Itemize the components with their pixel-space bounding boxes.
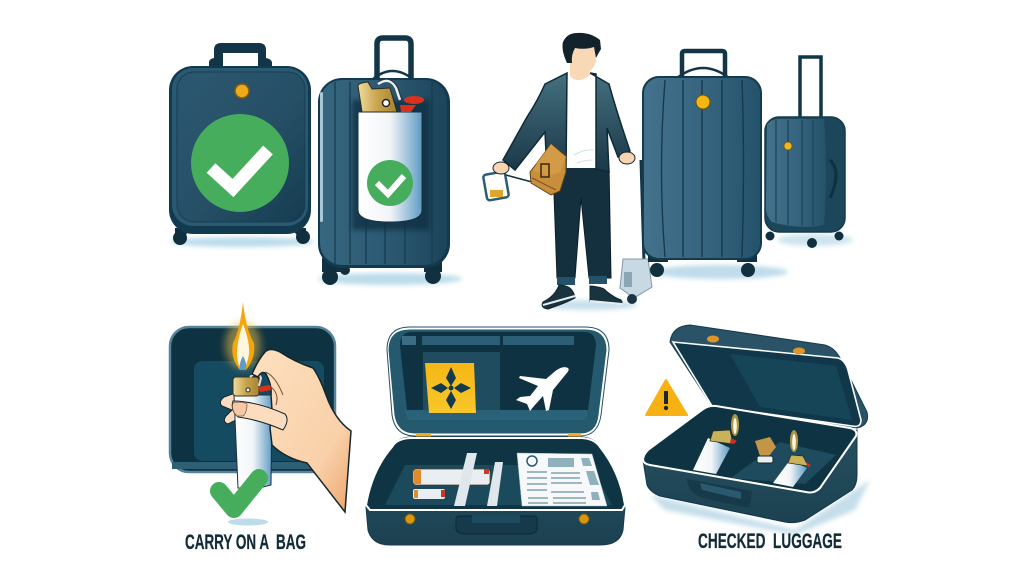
- red lever: [404, 96, 424, 104]
- jacket: [503, 73, 567, 172]
- back fingertips: [220, 392, 240, 424]
- red lever: [258, 385, 271, 392]
- dotted patch: [423, 352, 500, 415]
- shoes: [542, 285, 575, 309]
- shadow under check: [228, 518, 268, 526]
- large upright suitcase: [643, 51, 788, 279]
- messenger bag: [530, 144, 566, 195]
- shirt: [566, 74, 596, 168]
- floor shadow: [318, 273, 462, 285]
- case handle: [456, 516, 537, 534]
- floor shadow: [542, 300, 638, 310]
- label: carry on a bag: CARRY ON A BAG: [185, 531, 306, 554]
- base outer: [643, 430, 857, 523]
- flame: [225, 302, 261, 370]
- lighter graphic: [352, 79, 430, 230]
- small check badge: [367, 160, 413, 206]
- case body: [318, 78, 450, 268]
- case handle: [687, 479, 752, 507]
- gold rivets: [707, 336, 719, 342]
- open checked suitcase with lighters: [643, 325, 870, 535]
- base interior: [366, 438, 625, 510]
- green check badge: [191, 114, 289, 212]
- lighter cap: [358, 82, 397, 112]
- suitcase with large green check: [169, 43, 314, 247]
- warning triangle: [646, 380, 687, 415]
- small suitcase: [765, 57, 853, 248]
- document: [517, 453, 607, 506]
- carry handle: [209, 43, 272, 66]
- trousers: [553, 166, 611, 278]
- floor shadow: [170, 237, 314, 247]
- case body: [765, 117, 845, 232]
- telescopic handle: [800, 57, 821, 118]
- carry-on panel: hand holding lit lighter: [170, 302, 351, 526]
- neck and face: [570, 62, 590, 80]
- gold button: [235, 84, 249, 98]
- floor shadow: [777, 234, 853, 246]
- plane icon: [516, 367, 569, 411]
- hinges: [416, 433, 431, 438]
- wheels: [648, 248, 757, 277]
- lighter left: [693, 414, 739, 474]
- hand: [252, 350, 351, 512]
- floor shadow: [652, 265, 788, 279]
- yellow hazard square: [425, 363, 476, 413]
- left hand and card holder: [483, 162, 532, 201]
- wheels: [173, 228, 310, 245]
- case body: [169, 66, 311, 234]
- lid: [670, 325, 868, 428]
- base interior: [643, 406, 856, 492]
- dark bag opening: [170, 327, 335, 472]
- side handle: [830, 160, 836, 198]
- lighter body: [234, 395, 272, 488]
- gold button: [784, 142, 792, 150]
- lighter middle: [755, 437, 776, 463]
- soft shadow: [650, 480, 870, 535]
- wheels: [766, 232, 844, 248]
- wheels: [322, 258, 442, 285]
- batteries: [413, 469, 490, 499]
- case body: [643, 77, 761, 259]
- thumb: [232, 401, 287, 430]
- green check: [219, 478, 259, 509]
- bolts: [405, 514, 415, 524]
- lighter right: [773, 430, 811, 487]
- divider strips: [454, 453, 477, 506]
- telescopic handle: [682, 51, 725, 78]
- label: checked luggage: CHECKED LUGGAGE: [698, 530, 842, 553]
- suitcase with lighter: [318, 38, 462, 285]
- hair: [562, 33, 601, 63]
- wheeled bag: [620, 160, 652, 304]
- base outer: [366, 437, 625, 545]
- open suitcase with plane and hazard panel: [366, 327, 625, 545]
- right hand: [619, 152, 635, 164]
- gold button: [696, 95, 710, 109]
- traveller figure: [483, 33, 652, 310]
- telescopic handle: [377, 38, 411, 82]
- lighter cap: [233, 377, 259, 396]
- lid: [387, 327, 609, 436]
